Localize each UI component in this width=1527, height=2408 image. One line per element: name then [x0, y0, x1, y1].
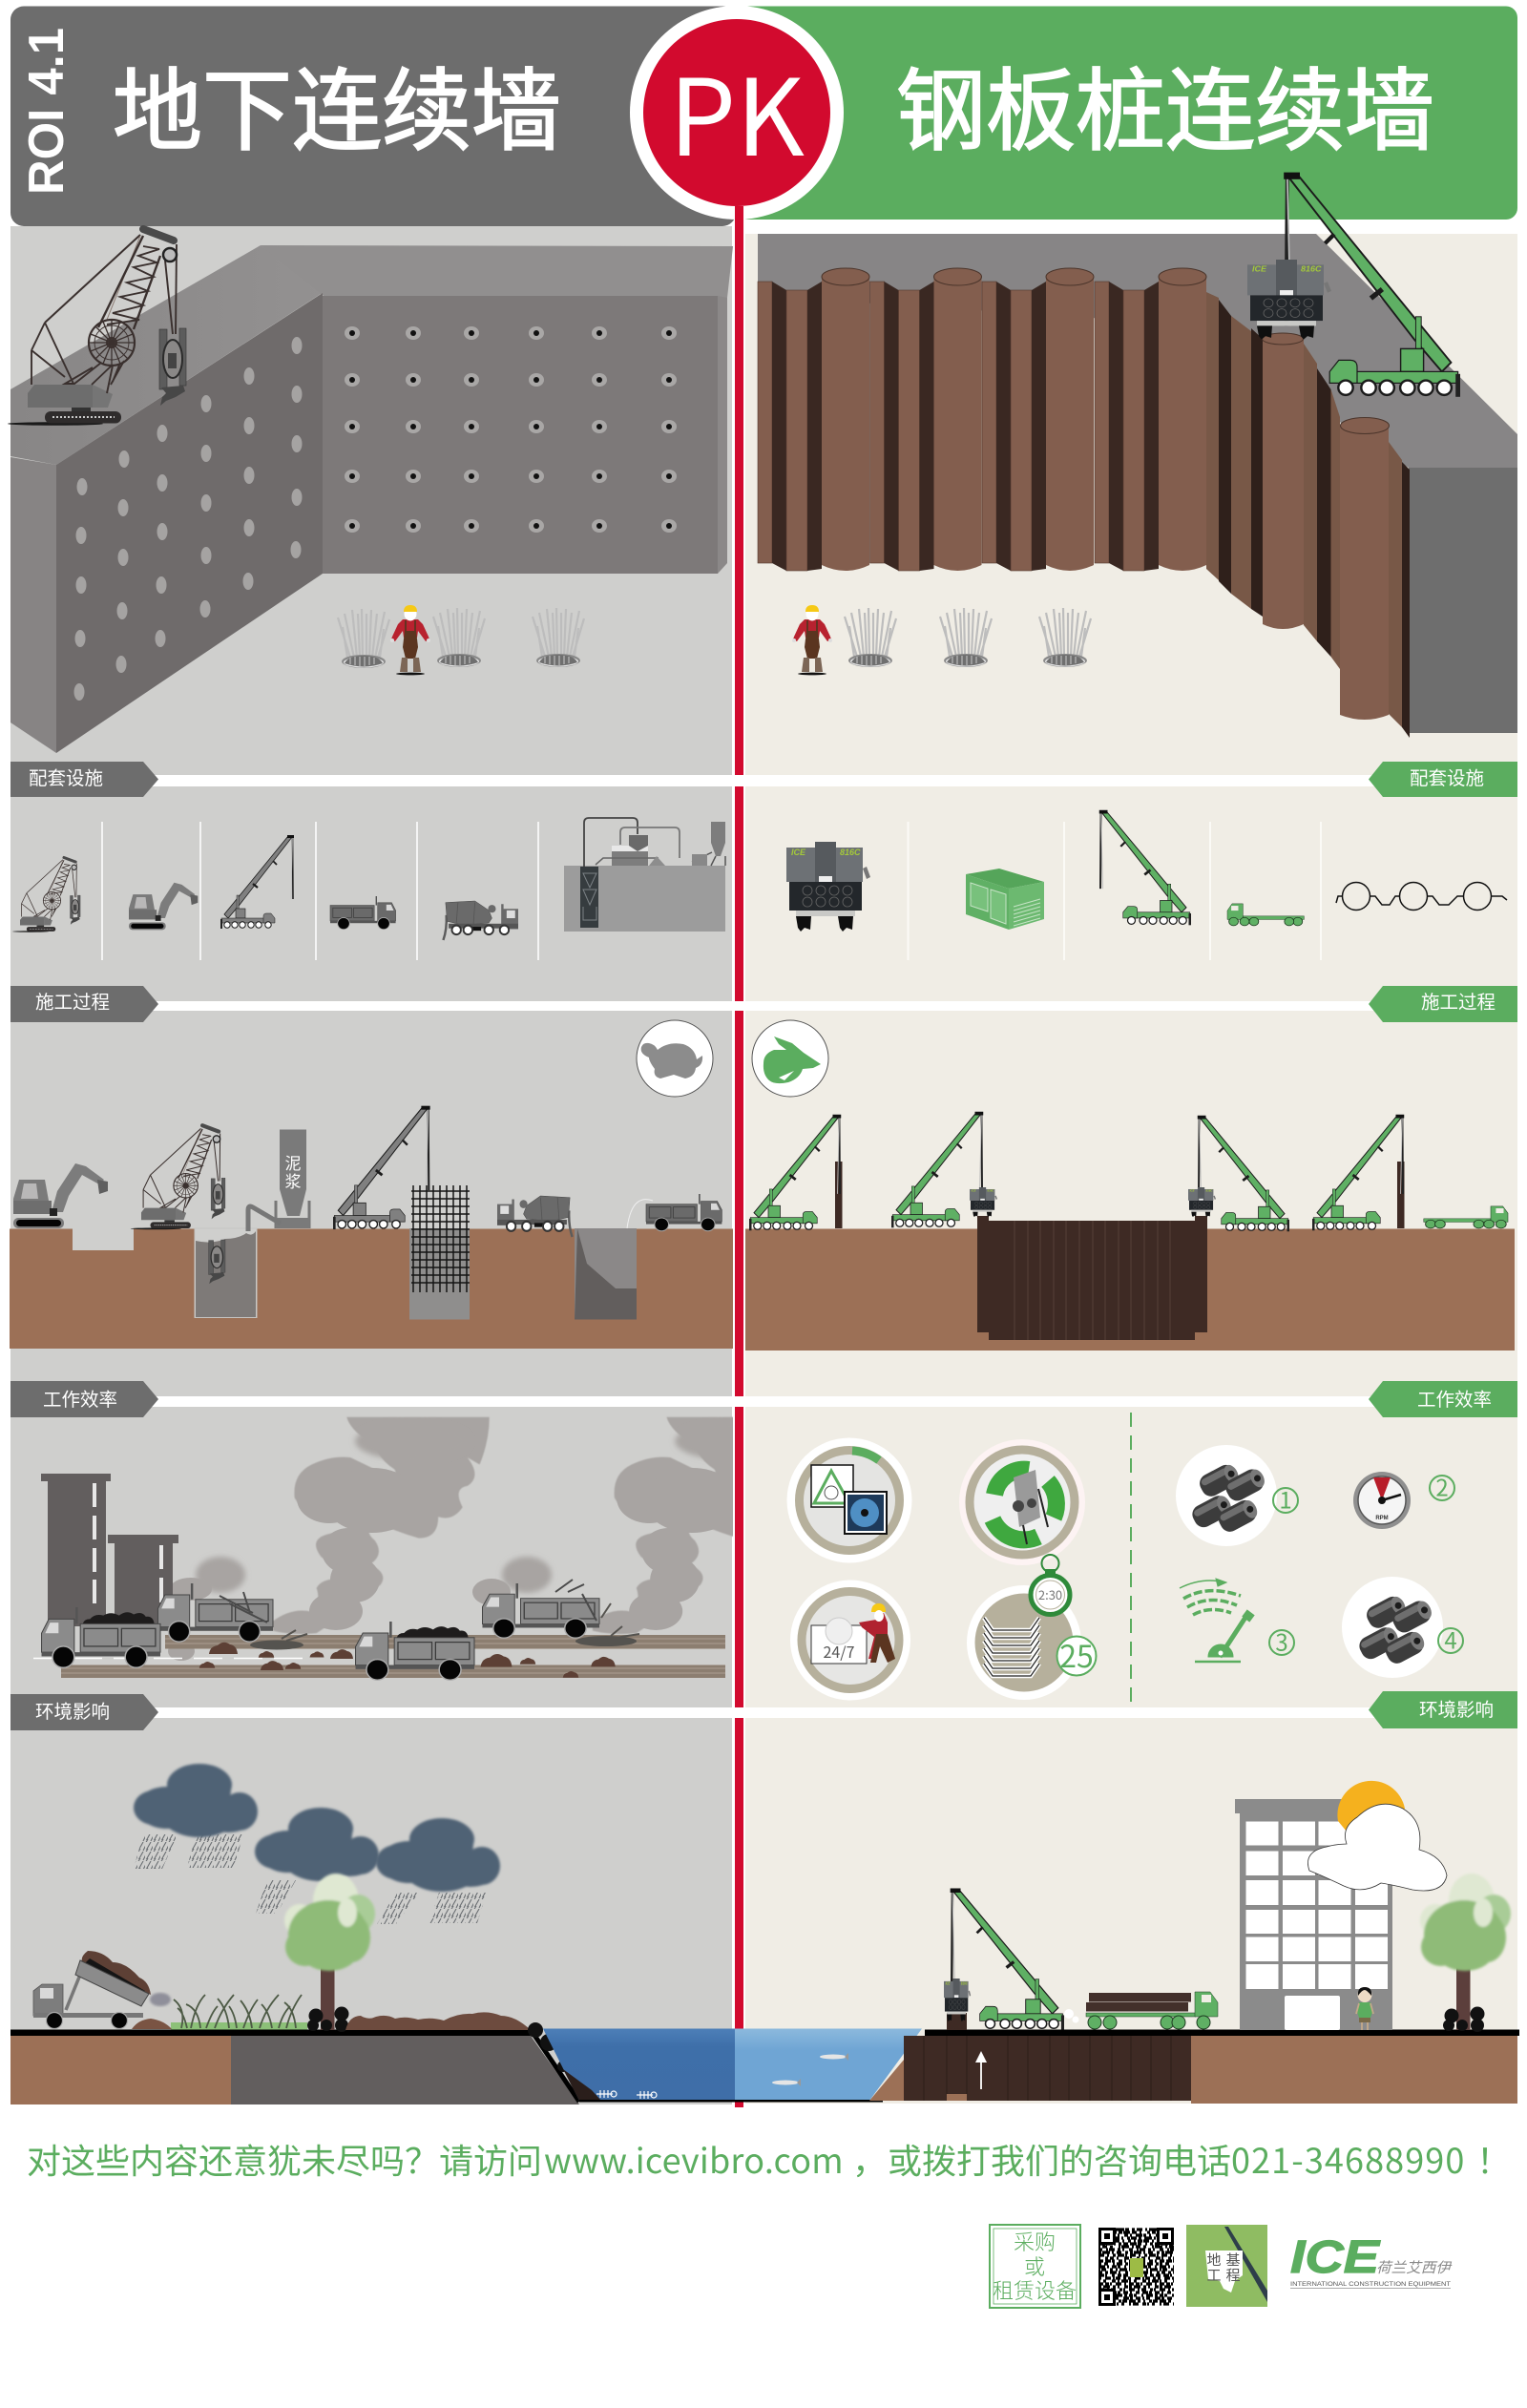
stopwatch 2:30	[1031, 1555, 1070, 1615]
worker	[792, 605, 832, 675]
truck B	[157, 1583, 273, 1642]
tag: 配套设施 left	[10, 762, 158, 797]
soil	[10, 1229, 733, 1349]
tag: 环境影响 left	[10, 1694, 158, 1730]
footer: QR code	[1098, 2228, 1174, 2306]
equipment: concrete mixer	[443, 901, 518, 940]
tree	[284, 1874, 375, 2032]
mud puddles	[250, 1603, 639, 1649]
footer: foundation engineering logo	[1186, 2225, 1267, 2307]
tree	[1420, 1874, 1511, 2032]
call to action text: ，	[852, 2134, 887, 2184]
slurry silo: 泥	[284, 1150, 302, 1174]
dead fish	[596, 2090, 657, 2099]
call to action text: www.icevibro.com	[544, 2134, 844, 2184]
badge number 25: 25	[1059, 1633, 1094, 1677]
call to action text: 对这些内容还意犹未尽吗	[27, 2134, 405, 2184]
footer: foundation engineering logo: 工	[1206, 2265, 1222, 2285]
concrete mixer	[497, 1196, 573, 1237]
tag: 施工过程 left: 施工过程	[35, 987, 110, 1014]
truck D	[483, 1583, 599, 1638]
polluted soil segment	[231, 2036, 579, 2104]
tag: 施工过程 right: 施工过程	[1421, 987, 1496, 1014]
tipping dump truck	[33, 1951, 172, 2029]
crawler crane with grab	[8, 229, 186, 426]
grass	[171, 1995, 307, 2029]
slurry silo	[248, 1130, 309, 1231]
tag: 工作效率 right	[1369, 1381, 1517, 1417]
footer: ICE logo	[1290, 2232, 1453, 2289]
panel: right equipment row	[786, 810, 1507, 960]
back row sheet piles	[758, 268, 1206, 571]
dark cloud 1	[134, 1764, 258, 1837]
section strip 环境影响	[143, 1707, 1384, 1718]
panel: left work efficiency	[33, 1417, 809, 1680]
excavator	[13, 1163, 108, 1228]
badge: stacked sheet piles, 25 units	[967, 1555, 1096, 1700]
call to action text: 或拨打我们的咨询电话	[888, 2134, 1231, 2184]
call to action text: 021-34688990	[1231, 2134, 1465, 2184]
tortoise badge	[637, 1020, 713, 1097]
section strip 施工过程	[143, 1001, 1384, 1011]
call to action text: ！	[1476, 2134, 1511, 2184]
footer: buy or rent box: 租赁设备	[993, 2274, 1077, 2305]
section strip 配套设施	[143, 775, 1384, 786]
tag: 配套设施 right: 配套设施	[1410, 763, 1484, 790]
equipment: excavator	[129, 883, 198, 930]
number 4: 4	[1444, 1623, 1457, 1655]
reinforcement trench	[409, 1228, 470, 1319]
eccentric rollers 1	[1176, 1445, 1280, 1546]
tag: 施工过程 left	[10, 986, 158, 1022]
number 4	[1438, 1623, 1463, 1655]
number 1: 1	[1279, 1481, 1292, 1516]
tag: 施工过程 right	[1369, 986, 1517, 1022]
panel: right construction process	[745, 1020, 1515, 1351]
footer: buy or rent box: 采购	[1014, 2226, 1056, 2256]
equipment: truck crane	[220, 835, 294, 929]
rain area	[134, 1834, 487, 1924]
heading: ROI 4.1: ROI 4.1	[19, 28, 74, 195]
footer: ICE logo: 荷兰艾西伊	[1376, 2257, 1453, 2277]
vibro hammer on pile	[1247, 260, 1331, 340]
vibro hammer right	[1188, 1187, 1216, 1217]
vertical dashed divider	[1130, 1413, 1132, 1702]
tag: 环境影响 left: 环境影响	[35, 1696, 110, 1724]
pile stub	[947, 2013, 967, 2030]
call to action text: ？请访问	[405, 2134, 542, 2184]
panel: right work efficiency	[786, 1413, 1463, 1702]
divider: red centre line	[735, 200, 743, 2107]
side row sheet piles	[1206, 292, 1410, 738]
tag: 环境影响 right: 环境影响	[1419, 1694, 1494, 1722]
footer: ICE logo: ICE	[1290, 2232, 1381, 2283]
equipment: crawler crane	[12, 857, 80, 932]
ground strip	[10, 2029, 535, 2036]
black shoreline debris	[528, 2022, 579, 2102]
tag: 工作效率 left	[10, 1381, 158, 1417]
badge: PK	[630, 6, 844, 220]
tag: 工作效率 left: 工作效率	[43, 1384, 117, 1412]
heading: diaphragm wall: 地下连续墙	[113, 39, 561, 169]
truck smoke puffs	[1064, 2009, 1078, 2023]
truck crane 1	[749, 1115, 841, 1230]
soil segment	[10, 2036, 231, 2104]
header: right green banner	[737, 6, 1517, 220]
section strip 工作效率	[143, 1396, 1384, 1407]
truck crane 2	[891, 1112, 983, 1227]
side wall anchor holes	[74, 337, 302, 701]
footer: buy or rent box	[990, 2225, 1080, 2308]
grab in trench	[209, 1240, 225, 1284]
equipment: dump truck	[330, 896, 396, 930]
footer: ICE logo: INTERNATIONAL CONSTRUCTION EQUIPMENT	[1290, 2281, 1451, 2288]
equipment: truck crane	[1099, 810, 1191, 925]
number 3	[1269, 1624, 1294, 1657]
rebar bundle 1	[845, 608, 896, 667]
header: left grey banner	[10, 6, 736, 226]
tag: 环境影响 right	[1369, 1691, 1517, 1728]
footer: buy or rent box: 或	[1024, 2251, 1045, 2281]
muddy road tracks	[33, 1635, 725, 1678]
crawler crane	[131, 1125, 225, 1229]
badge: recycle hammer	[959, 1439, 1085, 1565]
dark cloud 2	[255, 1808, 379, 1881]
footer: foundation engineering logo: 程	[1225, 2265, 1241, 2285]
buildings	[41, 1474, 178, 1626]
water body	[543, 2029, 922, 2102]
scene: sheet pile wall overview	[758, 173, 1517, 738]
slurry silo: 浆	[284, 1168, 302, 1192]
rebar bundle 3	[533, 608, 584, 667]
truck C with load	[356, 1622, 474, 1680]
equipment: flatbed truck	[1227, 904, 1304, 926]
concrete pour trench	[575, 1228, 637, 1319]
dirt along shore	[345, 2012, 531, 2030]
equipment: sheet pile profile	[1336, 882, 1507, 911]
soil wedge	[869, 2036, 924, 2101]
worker	[390, 605, 430, 675]
sheet pile wall section	[904, 2036, 1191, 2101]
rebar bundle 2	[433, 608, 485, 667]
flatbed truck	[1424, 1206, 1508, 1228]
number 2	[1430, 1470, 1454, 1502]
truck crane 3	[1198, 1116, 1289, 1231]
panel: left background	[10, 226, 732, 2104]
rebar bundle 1	[338, 609, 389, 668]
dump truck	[646, 1194, 722, 1231]
rpm gauge: RPM	[1375, 1516, 1389, 1521]
rebar bundle 3	[1039, 608, 1091, 667]
soil	[745, 1229, 1515, 1351]
live fish	[772, 2053, 848, 2086]
heading: sheet pile wall: 钢板桩连续墙	[896, 39, 1434, 169]
rebar bundle 2	[940, 608, 992, 667]
frequency lever	[1180, 1579, 1252, 1662]
equipment: slurry plant	[564, 818, 725, 932]
truck crane 4	[1312, 1115, 1404, 1230]
truck A with load	[42, 1607, 160, 1667]
arrow up	[975, 2051, 987, 2089]
excavated sheet pile pit	[977, 1216, 1207, 1340]
back wall anchor holes	[345, 326, 677, 533]
flatbed with pile load	[1086, 1992, 1218, 2029]
rebar cage	[411, 1185, 470, 1292]
eccentric rollers 4	[1342, 1577, 1447, 1678]
footer: foundation engineering logo: 基	[1225, 2250, 1241, 2270]
ground strip	[925, 2029, 1519, 2036]
dark cloud 3	[376, 1818, 500, 1892]
dirt piles	[199, 1643, 616, 1678]
vibro hammer	[944, 1979, 971, 2021]
tag: 配套设施 left: 配套设施	[29, 763, 103, 790]
excavated notch	[73, 1228, 134, 1250]
building	[1235, 1799, 1392, 2030]
tag: 配套设施 right	[1369, 762, 1517, 797]
slurry trench	[195, 1228, 257, 1317]
pile in the air 2	[1397, 1162, 1405, 1228]
tag: 工作效率 right: 工作效率	[1417, 1384, 1492, 1412]
debris on trucks	[220, 1580, 596, 1623]
soil	[1191, 2036, 1517, 2104]
scene: concrete wall overview	[8, 229, 733, 753]
panel: left environmental impact	[10, 1764, 579, 2104]
stopwatch 2:30: 2:30	[1038, 1585, 1062, 1603]
pour stream arc	[627, 1200, 653, 1228]
vibro hammer left	[970, 1187, 997, 1217]
equipment: green power pack	[966, 869, 1044, 930]
white cloud	[1307, 1804, 1447, 1891]
green crane	[1284, 173, 1460, 397]
badge: coolant warning	[786, 1437, 912, 1563]
rabbit badge	[752, 1020, 828, 1097]
smoke plumes	[168, 1416, 733, 1661]
panel: right environmental impact	[869, 1781, 1519, 2104]
panel: left construction process	[10, 1020, 733, 1349]
badge: 24/7 operation: 24/7	[824, 1640, 855, 1663]
number 3: 3	[1275, 1624, 1288, 1657]
badge: PK: PK	[669, 32, 805, 186]
truck crane	[333, 1106, 430, 1229]
footer: foundation engineering logo: 地	[1206, 2250, 1222, 2270]
number 2: 2	[1435, 1470, 1449, 1502]
rpm gauge	[1353, 1472, 1411, 1529]
number 1	[1273, 1481, 1298, 1516]
pile in the air 1	[835, 1162, 842, 1228]
badge: 24/7 operation	[790, 1581, 910, 1701]
person	[1356, 1987, 1373, 2030]
equipment: vibro hammer	[786, 842, 870, 932]
truck crane	[951, 1888, 1064, 2029]
panel: left equipment row	[12, 818, 725, 960]
sun	[1337, 1781, 1405, 1842]
panel: right background	[745, 234, 1517, 2104]
